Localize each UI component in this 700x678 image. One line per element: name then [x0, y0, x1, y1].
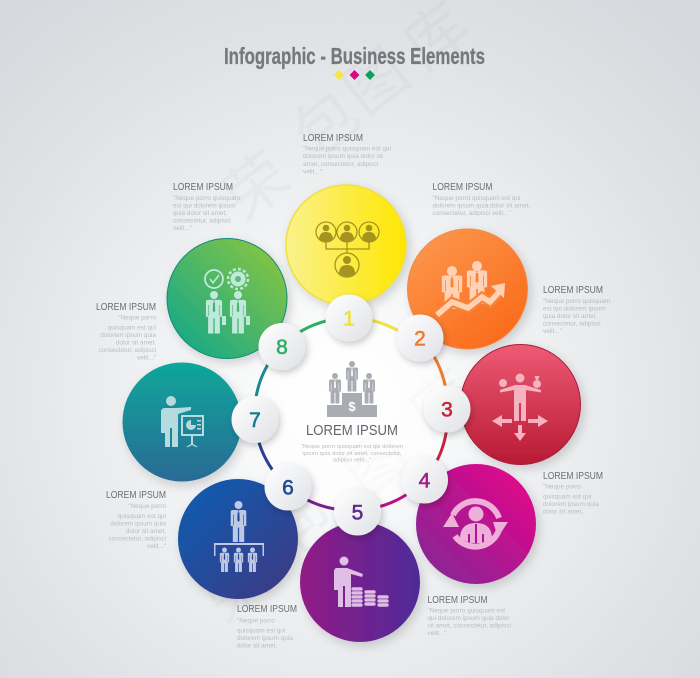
label 2: "Neque porro quisquam est qui [432, 195, 520, 202]
number 5: 5 [352, 502, 363, 524]
label 3 [543, 285, 610, 335]
label 7 left lower: velit..." [147, 543, 166, 550]
label 4: dolor sit amet, [543, 508, 583, 516]
label 7 left lower: quisquam est qui [118, 513, 166, 520]
number 1: 1 [343, 308, 355, 330]
number 2 [396, 314, 444, 362]
label 9 upper left [173, 182, 240, 232]
label 7 left lower: consectetur, adipisci [108, 536, 166, 542]
label 9 upper left: LOREM IPSUM [173, 182, 233, 193]
label 3: quia dolor sit amet, [543, 313, 597, 320]
label 6 bottom: "Neque porro [237, 618, 275, 624]
label 9 upper left: "Neque porro quisquam [173, 195, 240, 202]
icon: man with coin stacks [334, 556, 389, 607]
label 2: LOREM IPSUM [432, 182, 492, 193]
icon: presenter with chart board [161, 396, 204, 447]
label 4: LOREM IPSUM [543, 471, 603, 482]
centre icon: podium: $ [348, 399, 356, 414]
label 5: sit amet, consectetur, adipisci [428, 622, 511, 630]
label 5: qui dolorem ipsum quia dolor [428, 615, 510, 622]
centre text: adipisci velit..." [333, 458, 371, 464]
watermark: 图 [331, 418, 422, 511]
ring connecting the numbers [255, 318, 447, 510]
label 7 left lower: LOREM IPSUM [106, 490, 166, 501]
panel 3: red circle [460, 344, 580, 464]
label 4 [543, 471, 603, 516]
label 4: dolorem ipsum quia [543, 501, 599, 508]
label 6 bottom: dolor sit amet, [237, 642, 277, 650]
label 8 left middle: velit..." [137, 354, 156, 362]
number 5 [334, 488, 381, 536]
centre text [301, 444, 403, 464]
watermark: 图 [331, 36, 422, 129]
label 3: consectetur, adipisci [543, 320, 601, 328]
label 9 upper left: velit..." [173, 225, 192, 232]
label 7 left lower: dolorem ipsum quia [110, 520, 166, 528]
label 4: quisquam est qui [543, 494, 591, 500]
label 6 bottom [237, 604, 297, 650]
icon: person in cycle arrows [443, 501, 508, 547]
label 8 left middle: dolorem ipsum quia [100, 332, 156, 339]
title dots [334, 70, 375, 80]
label 1 [303, 133, 391, 176]
panel 1: yellow circle [286, 185, 406, 305]
label 5 [428, 595, 511, 637]
icon: businessman with choices [492, 374, 548, 441]
label 8 left middle [96, 302, 156, 362]
number 8: 8 [276, 336, 288, 359]
label 9 upper left: quia dolor sit amet, [173, 210, 227, 217]
label 2: dolorem ipsum quia dolor sit amet, [432, 202, 530, 210]
icon: team hierarchy [316, 222, 379, 277]
label 9 upper left: consectetur, adipisci [173, 218, 231, 224]
number 3: 3 [441, 398, 453, 422]
label 1: amet, consectetur, adipisci [303, 161, 378, 168]
label 1: LOREM IPSUM [303, 133, 363, 144]
label 1: "Neque porro quisquam est qui [303, 146, 391, 152]
number 1 [326, 294, 372, 342]
label 4: "Neque porro [543, 484, 581, 490]
label 5: LOREM IPSUM [428, 595, 488, 606]
label 8 left middle: dolor sit amet, [116, 340, 156, 346]
number 6: 6 [282, 476, 294, 500]
label 8 left middle: LOREM IPSUM [96, 302, 156, 313]
label 7 left lower: dolor sit amet, [126, 528, 166, 535]
number 2: 2 [414, 328, 426, 350]
panel 2: orange circle [408, 229, 528, 349]
label 6 bottom: dolorem ipsum quia [237, 635, 293, 642]
label 7 left lower: "Neque porro [128, 503, 166, 510]
label 9 upper left: est qui dolorem ipsum [173, 202, 236, 210]
number 4 [401, 456, 448, 504]
label 3: velit..." [543, 328, 562, 335]
icon: team on rising arrow [437, 261, 505, 315]
label 8 left middle: "Neque porro [118, 314, 156, 322]
watermark: 库 [396, 358, 487, 451]
label 7 left lower [106, 490, 166, 550]
centre text: ipsum quia dolor sit amet, consectetur, [303, 451, 402, 457]
panel 6: blue circle [178, 479, 298, 599]
label 2: consectetur, adipisci velit..." [432, 210, 511, 217]
label 8 left middle: quisquam est qui [108, 324, 156, 332]
centre icon: podium [327, 361, 377, 417]
watermark: 包 [281, 78, 372, 171]
icon: manager over three staff [214, 501, 264, 572]
centre disc [256, 319, 446, 509]
icon: two men with clock and gear [205, 269, 250, 334]
centre heading: LOREM IPSUM [306, 423, 398, 439]
centre text: "Neque porro quisquam est qui dolorem [301, 444, 403, 450]
label 5: velit..." [428, 630, 446, 637]
label 1: dolorem ipsum quia dolor sit [303, 153, 383, 160]
number 3 [424, 386, 470, 432]
panel 4: magenta circle [416, 464, 536, 584]
number 8 [258, 323, 306, 370]
label 3: "Neque porro quisquam [543, 298, 610, 305]
number 6 [264, 464, 312, 510]
number 7 [232, 396, 278, 443]
watermark: 包 [261, 478, 352, 571]
panel 7: teal circle [122, 362, 242, 482]
label 6 bottom: quisquam est qui [237, 628, 285, 634]
watermark: 荣 [211, 140, 302, 233]
number 4: 4 [419, 470, 431, 492]
label 3: est qui dolorem ipsum [543, 306, 606, 312]
label 6 bottom: LOREM IPSUM [237, 604, 297, 615]
panel 5: purple circle [300, 522, 420, 642]
label 8 left middle: consectetur, adipisci [98, 347, 156, 354]
label 2 [432, 182, 530, 217]
label 3: LOREM IPSUM [543, 285, 603, 296]
number 7: 7 [249, 409, 261, 432]
label 5: "Neque porro quisquam est [428, 608, 505, 614]
watermark: 荣 [191, 543, 282, 636]
label 1: velit..." [303, 168, 322, 176]
title: Infographic - Business Elements [224, 43, 485, 69]
watermark [191, 0, 487, 636]
panel 8: green circle [167, 238, 287, 358]
